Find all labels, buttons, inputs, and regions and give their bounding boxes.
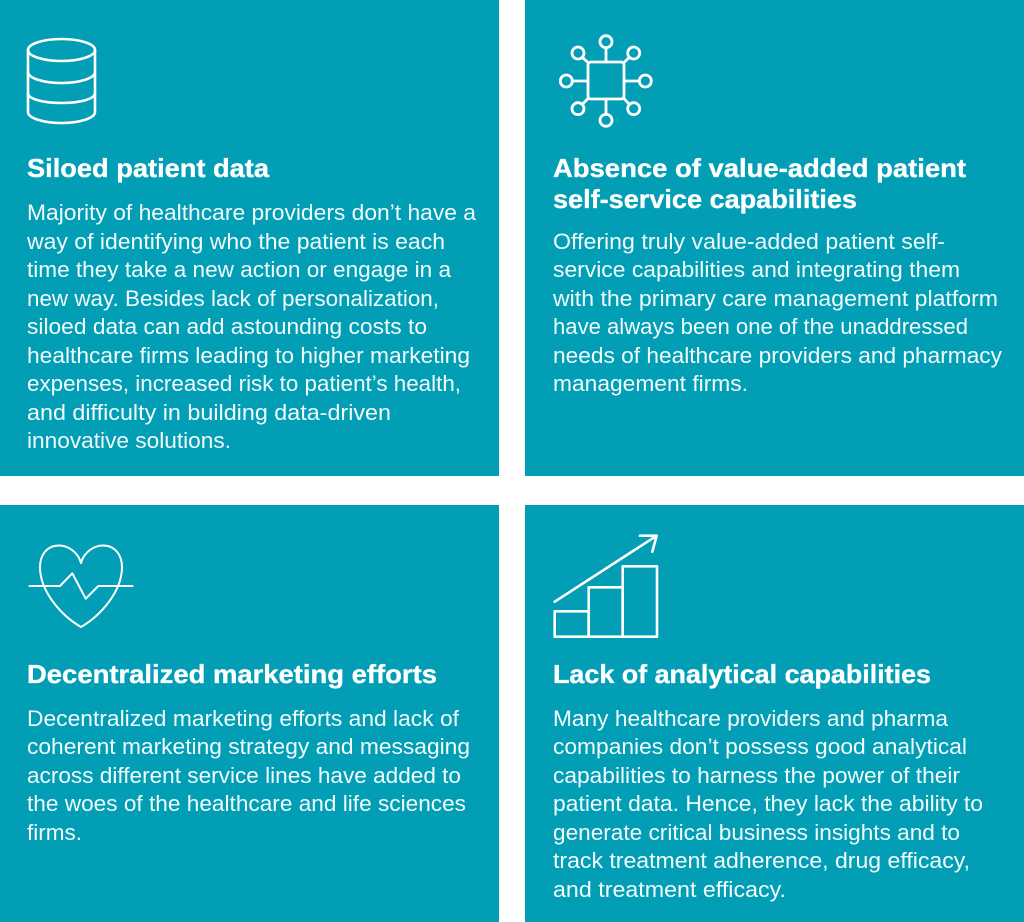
- text block: self-service description: with the primary care management platform: [552, 286, 998, 311]
- text block: siloed patient data description: way of identifying who the patient is each: [26, 229, 445, 254]
- text block: analytical capabilities description: and treatment efficacy.: [553, 877, 786, 902]
- heading: absence of value-added capabilities: self-service capabilities: [553, 184, 857, 214]
- heading: lack of analytical capabilities: Lack of analytical capabilities: [553, 659, 931, 689]
- text block: self-service description: needs of healthcare providers and pharmacy: [553, 343, 1002, 368]
- text block: analytical capabilities description: Many healthcare providers and pharma: [553, 706, 949, 731]
- text block: decentralized marketing description: Decentralized marketing efforts and lack of: [27, 706, 460, 731]
- text block: siloed patient data description: Majority of healthcare providers don’t have a: [27, 200, 477, 225]
- icon: network hub: [560, 36, 651, 126]
- heading: absence of value-added capabilities: Absence of value-added patient: [553, 153, 966, 183]
- text block: analytical capabilities description: companies don’t possess good analytical: [553, 734, 967, 759]
- text block: siloed patient data description: time they take a new action or engage in a: [27, 257, 452, 282]
- text block: siloed patient data description: [26, 200, 477, 453]
- heading: absence of value-added capabilities: [553, 153, 966, 214]
- text block: analytical capabilities description: [553, 706, 983, 902]
- text block: siloed patient data description: and difficulty in building data-driven: [27, 400, 391, 425]
- text block: self-service description: management firms.: [553, 371, 748, 396]
- text block: siloed patient data description: siloed data can add astounding costs to: [27, 314, 427, 339]
- text block: siloed patient data description: new way. Besides lack of personalization,: [27, 286, 439, 311]
- text block: analytical capabilities description: patient data. Hence, they lack the ability to: [553, 791, 983, 816]
- panel: siloed patient data: [0, 0, 499, 476]
- panel: lack of analytical capabilities: [525, 505, 1024, 922]
- text block: decentralized marketing description: across different service lines have added to: [27, 763, 461, 788]
- text block: analytical capabilities description: generate critical business insights and to: [553, 820, 960, 845]
- panel: value-added self-service: [525, 0, 1024, 476]
- text block: self-service description: [552, 229, 1002, 396]
- text block: decentralized marketing description: the woes of the healthcare and life sciences: [27, 791, 466, 816]
- text block: decentralized marketing description: [27, 706, 470, 845]
- icon: rising bar chart with arrow: [555, 536, 657, 637]
- text block: analytical capabilities description: capabilities to harness the power of their: [553, 763, 960, 788]
- text block: siloed patient data description: innovative solutions.: [27, 428, 231, 453]
- text block: self-service description: service capabilities and integrating them: [553, 257, 960, 282]
- heading: decentralized marketing efforts: Decentralized marketing efforts: [27, 659, 437, 689]
- icon: heart with pulse: [30, 546, 132, 627]
- icon: database: [28, 39, 95, 123]
- text block: self-service description: have always been one of the unaddressed: [553, 314, 968, 339]
- text block: analytical capabilities description: track treatment adherence, drug efficacy,: [553, 848, 970, 873]
- text block: siloed patient data description: expenses, increased risk to patient’s health,: [27, 371, 461, 396]
- panel: decentralized marketing efforts: [0, 505, 499, 922]
- text block: self-service description: Offering truly value-added patient self-: [553, 229, 945, 254]
- heading: siloed patient data: Siloed patient data: [27, 153, 270, 183]
- text block: decentralized marketing description: coherent marketing strategy and messaging: [27, 734, 470, 759]
- text block: decentralized marketing description: firms.: [27, 820, 82, 845]
- text block: siloed patient data description: healthcare firms leading to higher marketing: [27, 343, 470, 368]
